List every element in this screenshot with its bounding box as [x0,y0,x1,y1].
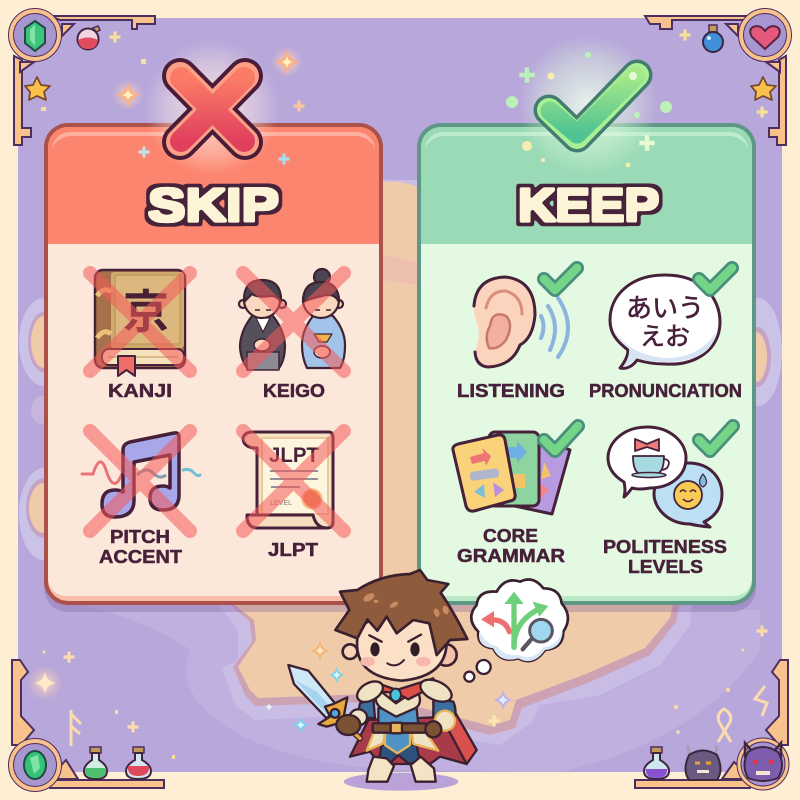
sparkles around hero [311,641,329,660]
small check: pronunciation [699,268,732,290]
potion: blue [703,25,723,52]
small check fill: politeness [699,426,733,451]
shoal on right edge [734,298,782,406]
icon: bowing people [239,269,345,370]
panel shadows [44,130,756,612]
sword [288,665,360,738]
face features [360,635,431,666]
thought dots [464,660,491,682]
potion: green [84,747,107,779]
panel header band [48,127,379,244]
panel body [421,127,752,601]
gem pendant [390,689,401,701]
icon: kanji book [95,270,185,376]
hair [335,570,467,655]
cape [350,698,477,764]
panel frame [417,123,756,605]
gem: heart [750,26,780,49]
sparkles: around cross [41,46,304,164]
panel frame [44,123,383,605]
icon: music note with pitch waves [82,433,200,517]
label: CORE GRAMMAR: CORE [483,526,538,546]
frame corner: bottom left [11,660,164,789]
small check: core grammar [544,426,578,451]
glow behind cross [144,40,280,176]
belt [373,723,426,733]
icon: green check [549,72,637,137]
icon: red cross [180,76,245,142]
heading: SKIP: SKIP [148,179,279,231]
magnifier [523,619,552,649]
arrows [488,597,540,647]
white bubble with teacup [608,427,686,497]
small check fill: listening [544,268,577,290]
cloud shade [479,628,563,661]
gem: green oval [24,751,46,779]
icon: grammar cards [453,432,570,514]
torso armor [350,675,455,753]
label: CORE GRAMMAR: GRAMMAR [457,546,565,566]
star: gold [25,77,50,100]
cross overlay: kanji [90,273,190,371]
label: POLITENESS LEVELS [603,537,727,577]
label: LISTENING: LISTENING [457,381,565,401]
label: POLITENESS LEVELS: LEVELS [628,557,703,577]
kanji glyph: 京 [123,286,169,338]
person left [239,280,286,370]
thought bubble with path choice [464,579,568,682]
potion: red [78,26,100,50]
label: KEIGO: KEIGO [263,381,325,401]
panel: skip [44,123,383,605]
sparkles: around check [506,52,672,168]
legs and boots [367,745,436,782]
label: PRONUNCIATION: PRONUNCIATION [589,381,742,401]
rune right [718,709,731,742]
label: PITCH ACCENT [99,527,182,567]
label: JLPT: JLPT [268,540,318,560]
head [335,570,467,681]
small check: listening [544,268,577,290]
panel: keep [417,123,756,605]
glow behind check [518,35,658,175]
shoals on left edge [19,298,69,386]
blue bubble [654,463,722,527]
scarf [373,678,433,699]
potion: purple [644,747,669,779]
character: knight hero [288,570,477,791]
cloud [471,579,568,661]
cross overlay: jlpt [243,431,344,531]
cross overlay: pitch accent [90,431,190,531]
arms [435,711,455,731]
scroll title: JLPT [269,444,319,467]
hair highlights [362,591,450,618]
label: PITCH ACCENT: PITCH [110,527,170,547]
smiling face [674,481,702,509]
star: gold [751,77,776,100]
background: map land and shoals [19,180,782,772]
scroll level tag: LEVEL [270,500,292,507]
cross overlay: keigo [243,273,344,371]
small check: politeness [699,426,733,451]
icon: ear with sound waves [474,277,568,367]
sparkles and runes: lower area [27,626,768,759]
small check fill: core grammar [544,426,578,451]
icon: speech bubble with kana [610,275,720,368]
label: POLITENESS LEVELS: POLITENESS [603,537,727,557]
icon: JLPT certificate scroll [243,432,333,528]
frame corner: bottom right [635,660,788,788]
label: KANJI: KANJI [108,381,172,401]
panel header band [421,127,752,244]
frame corner: top right [645,11,789,145]
rune left [71,710,81,746]
label: CORE GRAMMAR [457,526,565,566]
small check fill: pronunciation [699,268,732,290]
person right [302,269,345,368]
ground shadow [344,773,458,791]
creature: dark horned monster [686,746,720,780]
kana line two: えお [640,323,690,351]
label: PITCH ACCENT: ACCENT [99,547,182,567]
heading: KEEP: KEEP [518,179,659,231]
potion: red [126,747,151,779]
icon: polite speech bubbles [608,427,722,527]
lightning rune [755,686,767,716]
shoulders [354,677,386,706]
creature: purple demon [744,743,782,781]
gem: emerald [25,21,45,51]
tassets [385,732,410,753]
panel body [48,127,379,601]
frame corner: top left [11,11,155,145]
kana line one: あいう [626,293,704,323]
